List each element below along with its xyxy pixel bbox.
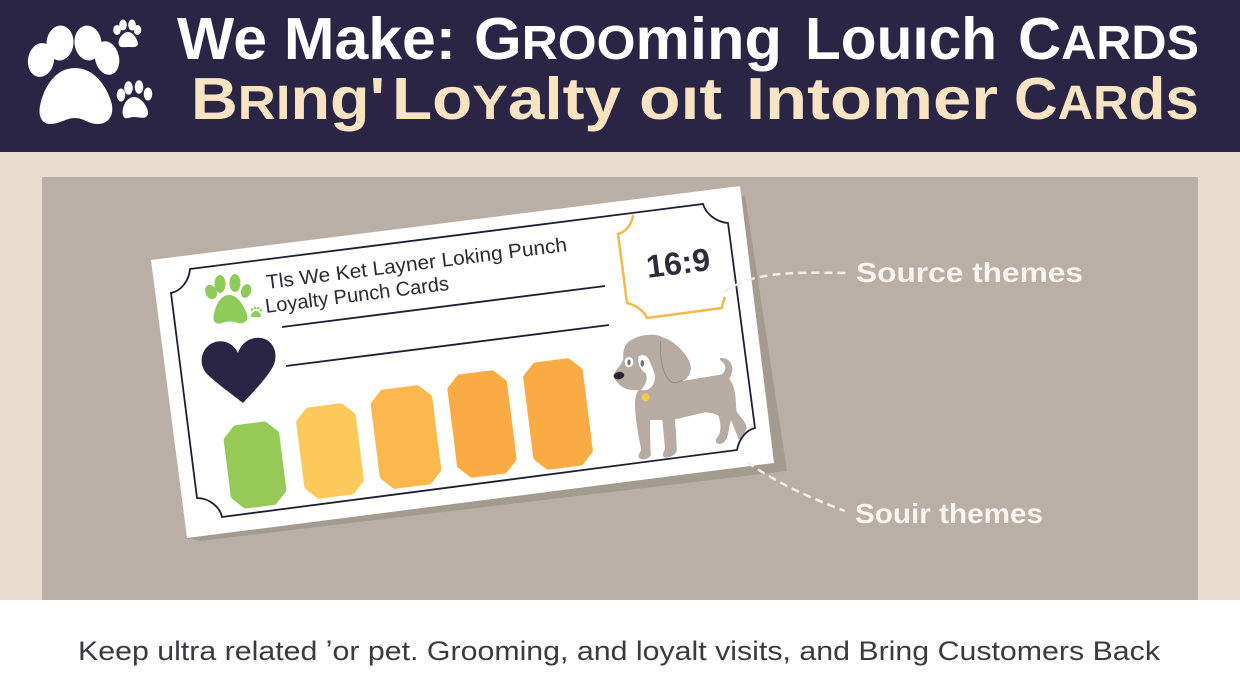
title line 2: Intomer (746, 66, 998, 132)
punch card (151, 186, 774, 538)
icon: green paw (203, 274, 262, 324)
card shadow (187, 195, 787, 541)
footer band (0, 600, 1240, 696)
callout label: source themes: Source themes (856, 257, 1083, 288)
ratio label: 16:9 (644, 241, 712, 285)
icon: tiny green paw (251, 311, 261, 317)
title line 2: oıt (639, 66, 722, 132)
card heading line 1: Tls We Ket Layner Loking Punch (265, 234, 568, 294)
punch slots (226, 361, 590, 506)
card inner border (171, 204, 755, 517)
icon: large paw (25, 24, 123, 124)
writing line 2 (286, 325, 609, 366)
panel: card display area (42, 177, 1198, 600)
title line 1: GROOming (474, 6, 782, 72)
title line 2: CARds (1014, 66, 1199, 132)
title line 2: BRIng' (191, 66, 385, 132)
title line 1 (177, 6, 1199, 72)
writing line 1 (282, 286, 605, 327)
header banner (0, 0, 1240, 152)
callout line: souir themes (747, 462, 845, 511)
ratio frame (618, 215, 725, 318)
title line 1: CARDS (1018, 6, 1199, 72)
title line 1: Louıch (805, 6, 997, 72)
page background (0, 152, 1240, 600)
callout label: souir themes: Souir themes (855, 498, 1043, 529)
icon: heart (202, 338, 276, 403)
icon: dog (613, 335, 747, 459)
icon: small paw top (113, 20, 141, 47)
title line 1: We Make: (177, 6, 456, 72)
callout line: source themes (724, 273, 846, 292)
footer tagline: Keep ultra related ʼor pet. Grooming, and loyalt visits, and Bring Customers Back (78, 636, 1161, 666)
title line 2 (191, 66, 1199, 132)
title line 2: LoYalty (392, 66, 621, 132)
card heading line 2: Loyalty Punch Cards (264, 273, 450, 318)
icon: small paw bottom (117, 80, 152, 118)
